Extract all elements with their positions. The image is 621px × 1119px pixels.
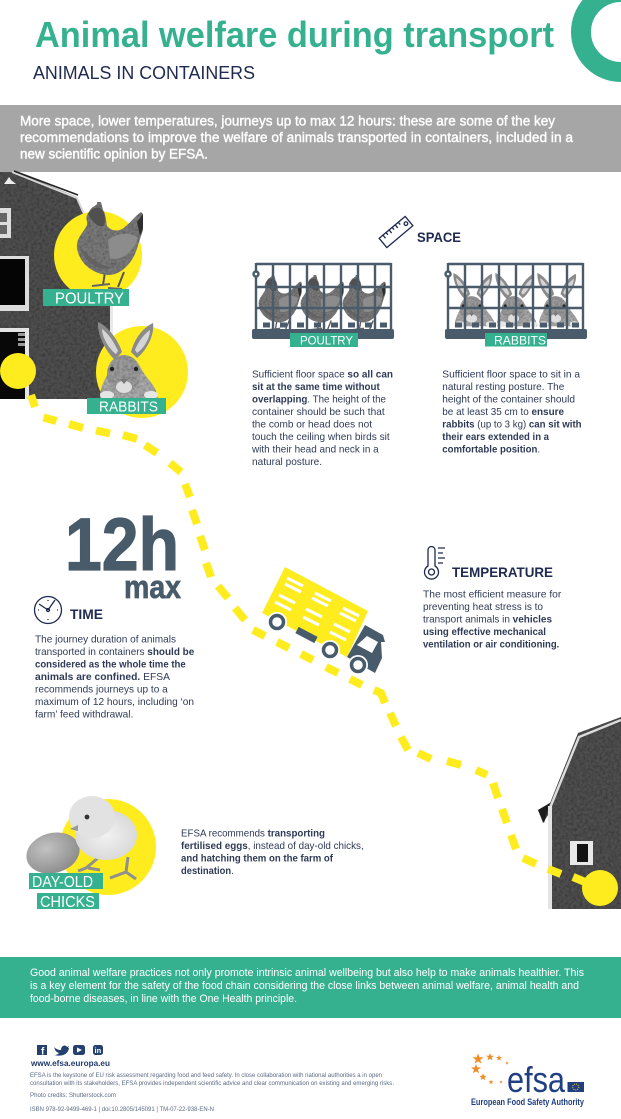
text: poultry space: with their head and neck in a: [251, 444, 379, 456]
decorative ring: [581, 0, 621, 72]
icon: poultry: [43, 202, 143, 308]
intro banner: new scientific opinion by EFSA.: [20, 146, 208, 162]
icon: rabbits: [87, 322, 188, 418]
text: time: recommends journeys up to a: [35, 684, 168, 696]
text: time: [35, 634, 194, 721]
title: Animal welfare during transport: [35, 14, 554, 55]
heading: space: SPACE: [417, 229, 461, 245]
text: rabbit space: height of the container should: [442, 394, 575, 406]
stat: 12h max: max: [124, 569, 181, 605]
icon: day-old chicks: DAY-OLD: [32, 874, 93, 891]
cage: poultry: POULTRY: [300, 333, 353, 347]
text: temperature: ventilation or air conditioning.: [423, 638, 559, 650]
footer text: [30, 1073, 394, 1113]
text: time: maximum of 12 hours, including ‘on: [35, 696, 194, 708]
cage: rabbits: RABBITS: [494, 335, 546, 347]
text: temperature: using effective mechanical: [423, 626, 546, 638]
text: rabbit space: [442, 368, 582, 456]
text: chicks: fertilised eggs, instead of day-old chicks,: [181, 840, 364, 852]
closing banner: food-borne diseases, in line with the One Health principle.: [30, 993, 297, 1005]
logo: EFSA: [471, 1053, 584, 1107]
website: www.efsa.europa.eu: [30, 1058, 110, 1068]
footer text: consultation with its stakeholders, EFSA provides independent scientific advice and clear communication on existing and emerging risks.: [30, 1081, 394, 1087]
text: rabbit space: be at least 35 cm to ensure: [442, 406, 564, 418]
icon: truck: [262, 567, 385, 675]
cage: rabbits: [445, 263, 587, 347]
text: temperature: preventing heat stress is to: [423, 601, 543, 613]
text: time: animals are confined. EFSA: [35, 671, 170, 683]
text: chicks: and hatching them on the farm of: [181, 853, 333, 865]
heading: time: TIME: [70, 606, 103, 622]
route end marker: [582, 870, 618, 906]
icon: day-old chicks: CHICKS: [40, 894, 95, 911]
icon: ruler: [379, 216, 413, 248]
barn: left: [0, 171, 113, 399]
cage: poultry: [252, 263, 394, 347]
route: dashed yellow path: [31, 395, 536, 864]
icon: poultry: POULTRY: [55, 291, 124, 308]
text: rabbit space: Sufficient floor space to sit in a: [442, 368, 580, 380]
social icons: [37, 1045, 103, 1058]
text: temperature: transport animals in vehicles: [423, 613, 552, 625]
text: rabbit space: comfortable position.: [442, 444, 540, 456]
text: rabbit space: rabbits (up to 3 kg) can sit with: [442, 418, 582, 430]
text: poultry space: container should be such that: [252, 406, 385, 418]
text: time: The journey duration of animals: [35, 634, 176, 646]
intro banner: [0, 105, 621, 172]
closing banner: is a key element for the safety of the food chain considering the close links between animal welfare, animal health and: [30, 980, 579, 992]
stat: 12h max: 12h: [65, 503, 179, 586]
text: poultry space: the comb or head does not: [252, 418, 372, 430]
text: poultry space: [251, 368, 393, 468]
icon: day-old chicks: [22, 796, 156, 911]
route start marker: [0, 353, 36, 389]
text: chicks: destination.: [181, 865, 234, 877]
text: rabbit space: natural resting posture. The: [442, 381, 564, 393]
heading: temperature: TEMPERATURE: [452, 564, 553, 580]
icon: thermometer: [424, 547, 445, 579]
text: time: transported in containers should be: [35, 646, 194, 658]
text: chicks: EFSA recommends transporting: [181, 828, 325, 840]
closing banner: [0, 957, 621, 1018]
social icons: in: [94, 1046, 102, 1055]
logo: EFSA: European Food Safety Authority: [471, 1097, 584, 1107]
social icons: f: [41, 1046, 45, 1058]
barn: right: [538, 717, 621, 909]
intro banner: More space, lower temperatures, journeys up to max 12 hours: these are some of the key: [20, 114, 555, 128]
intro banner: recommendations to improve the welfare of animals transported in containers, included in a: [20, 130, 573, 145]
text: poultry space: sit at the same time without: [252, 381, 380, 393]
icon: clock: [34, 596, 62, 624]
icon: rabbits: RABBITS: [99, 399, 158, 416]
footer text: Photo credits: Shutterstock.com: [30, 1093, 116, 1099]
footer text: EFSA is the keystone of EU risk assessment regarding food and feed safety. In close collaboration with national authorities a in open: [30, 1073, 382, 1079]
text: poultry space: Sufficient floor space so all can: [252, 368, 393, 380]
text: rabbit space: their ears extended in a: [442, 431, 549, 443]
text: poultry space: overlapping. The height of the: [252, 394, 386, 406]
footer text: ISBN 978-92-9499-469-1 | doi:10.2805/145091 | TM-07-22-938-EN-N: [30, 1107, 214, 1113]
logo: EFSA: efsa: [507, 1059, 566, 1100]
text: poultry space: touch the ceiling when birds sit: [252, 431, 390, 443]
text: temperature: The most efficient measure for: [423, 588, 562, 600]
text: poultry space: natural posture.: [252, 456, 322, 468]
text: time: considered as the whole time the: [35, 659, 186, 671]
text: temperature: [423, 588, 562, 650]
text: time: farm’ feed withdrawal.: [35, 709, 133, 721]
closing banner: Good animal welfare practices not only promote intrinsic animal wellbeing but also help to make animals healthier. This: [30, 967, 584, 979]
subtitle: ANIMALS IN CONTAINERS: [33, 63, 255, 83]
text: chicks: [181, 828, 364, 877]
